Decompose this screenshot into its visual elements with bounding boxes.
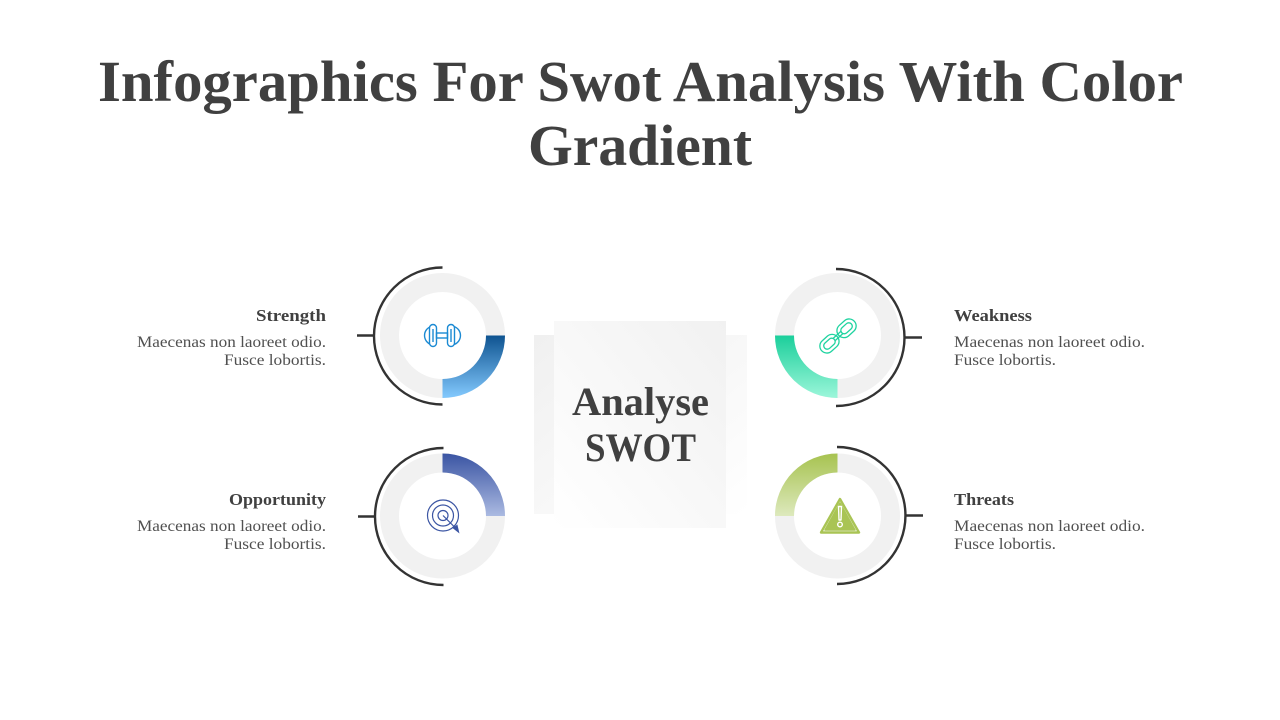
opportunity text xyxy=(137,490,327,553)
strength ring xyxy=(390,282,505,398)
threats text: Threats xyxy=(954,490,1014,509)
strength text: Strength xyxy=(256,306,327,325)
threats text: Maecenas non laoreet odio. xyxy=(954,518,1145,535)
opportunity ring xyxy=(390,454,505,569)
weakness text xyxy=(954,306,1145,369)
title: Infographics For Swot Analysis With Color xyxy=(98,49,1183,114)
opportunity text: Maecenas non laoreet odio. xyxy=(137,518,326,535)
strength text: Maecenas non laoreet odio. xyxy=(137,334,326,351)
threats text: Fusce lobortis. xyxy=(954,536,1056,553)
icon: chain link xyxy=(817,316,859,356)
weakness text: Weakness xyxy=(954,306,1032,325)
center label: Analyse xyxy=(572,379,709,424)
weakness ring xyxy=(775,282,890,398)
opportunity text: Opportunity xyxy=(229,490,327,509)
icon: warning triangle xyxy=(821,499,859,532)
title xyxy=(98,49,1183,178)
strength text: Fusce lobortis. xyxy=(224,352,326,369)
title: Gradient xyxy=(528,113,753,178)
strength bracket arc xyxy=(357,268,442,404)
panel: center Analyse SWOT xyxy=(534,321,747,528)
panel: Opportunity xyxy=(137,448,505,585)
panel: Weakness xyxy=(775,269,1145,406)
panel: Threats xyxy=(775,447,1145,584)
weakness text: Fusce lobortis. xyxy=(954,352,1056,369)
center label: SWOT xyxy=(585,425,696,470)
strength text xyxy=(137,306,327,369)
opportunity text: Fusce lobortis. xyxy=(224,536,326,553)
threats ring xyxy=(775,454,890,569)
icon: dumbbell xyxy=(425,324,460,346)
weakness bracket arc xyxy=(836,269,922,406)
threats text xyxy=(954,490,1145,553)
panel: Strength xyxy=(137,268,505,404)
icon: target with arrow xyxy=(428,500,458,532)
threats bracket arc xyxy=(837,447,923,584)
center label xyxy=(572,379,709,470)
opportunity bracket arc xyxy=(358,448,444,585)
weakness text: Maecenas non laoreet odio. xyxy=(954,334,1145,351)
